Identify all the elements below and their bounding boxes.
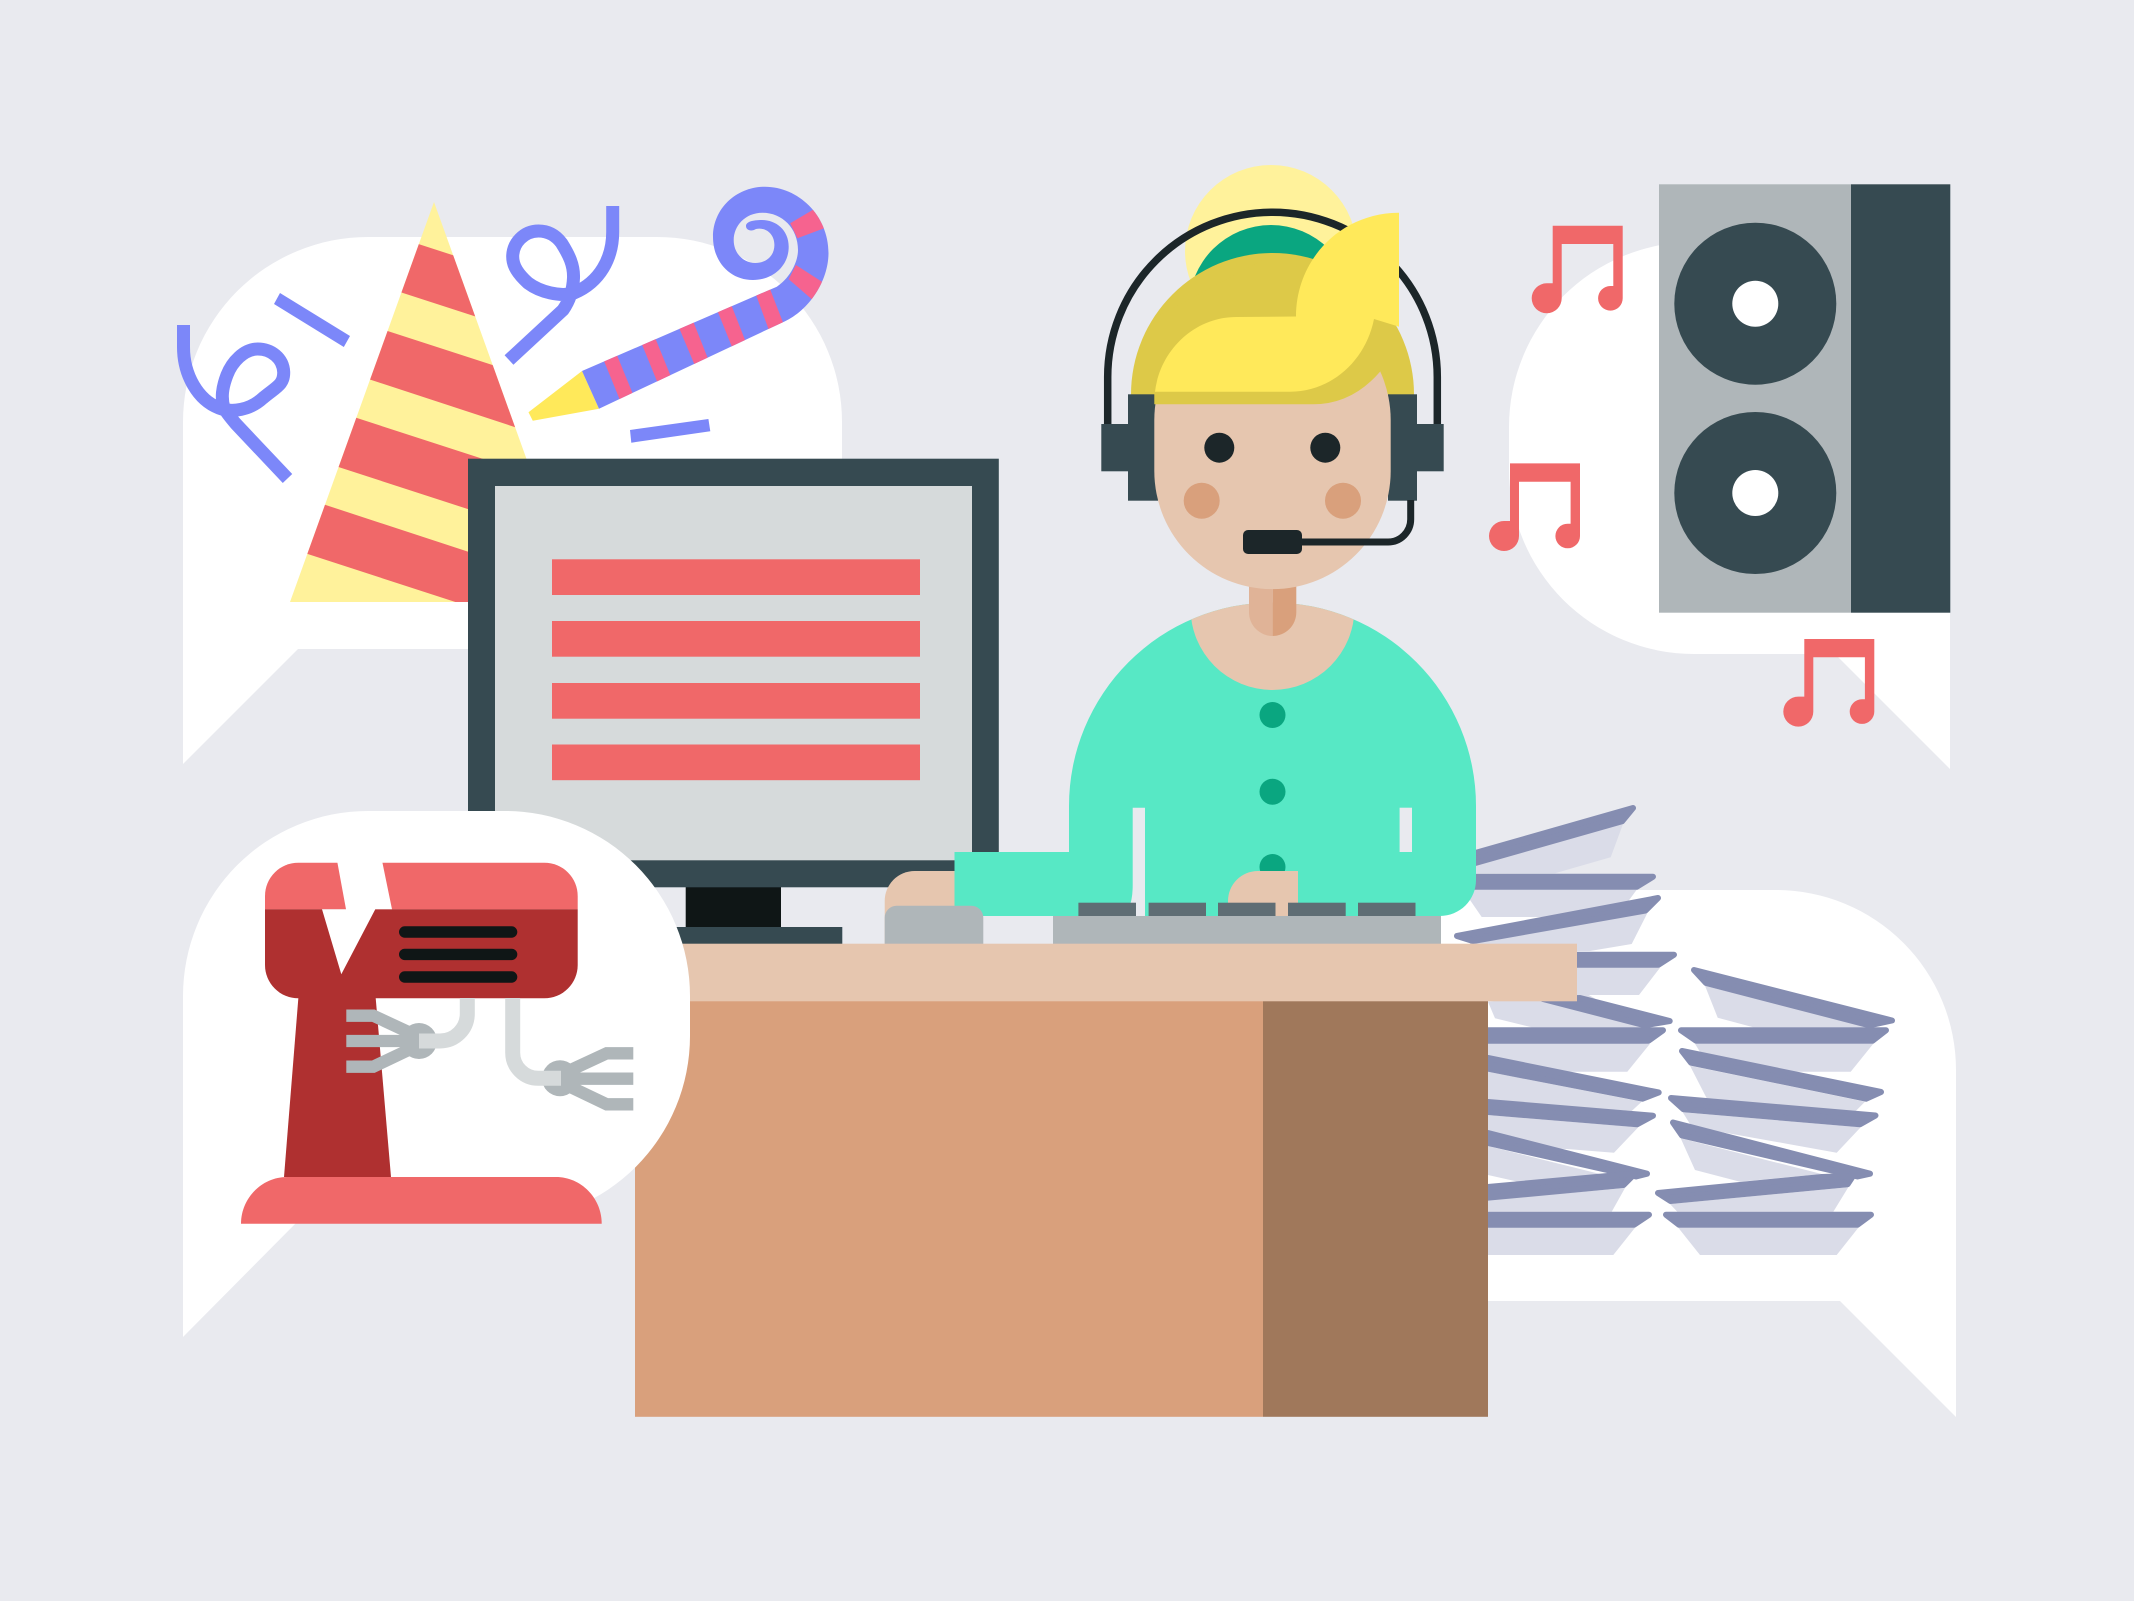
hair back [1131, 253, 1414, 394]
icon: confetti bar upper [274, 293, 350, 347]
desk [635, 944, 1577, 1417]
shirt buttons [1260, 702, 1286, 880]
mixer vents [399, 926, 517, 983]
keyboard [1053, 916, 1441, 944]
hair fringe shadow [1154, 255, 1380, 404]
mixer column [284, 990, 391, 1177]
arm gaps [1120, 808, 1412, 916]
neck [1249, 580, 1296, 636]
whisk right [513, 998, 633, 1104]
icon: party hat [290, 202, 526, 602]
mixer base [241, 1177, 602, 1224]
speech bubble: music [1509, 242, 1950, 769]
icon: stand mixer [241, 862, 633, 1224]
stack of plates: front column [1658, 970, 1892, 1255]
hair band [1189, 225, 1353, 389]
mixer head [265, 862, 578, 998]
icon: left streamer curl [184, 325, 288, 478]
torso [954, 602, 1476, 916]
mouse [885, 906, 983, 944]
speech bubble: dishes [1300, 890, 1956, 1417]
eyes [1204, 433, 1340, 463]
icon: music note bottom [1783, 639, 1874, 727]
stack of plates: back column [1457, 808, 1674, 1255]
icon: party blower [528, 187, 830, 421]
monitor [468, 459, 999, 944]
collar skin [1191, 602, 1354, 690]
cheeks [1184, 483, 1361, 519]
headset band [1108, 212, 1437, 425]
headset ear cups [1101, 394, 1444, 501]
icon: music note top [1532, 226, 1623, 313]
icon: loudspeaker [1659, 184, 1950, 613]
right hand [1228, 871, 1298, 916]
screen text lines [552, 559, 920, 780]
speech bubble: mixer [183, 811, 690, 1337]
whisk left [346, 998, 467, 1067]
icon: confetti bar lower [630, 419, 710, 443]
monitor stand [640, 887, 842, 944]
icon: right streamer curl [509, 206, 613, 360]
person: call-centre worker [885, 165, 1476, 944]
icon: music note middle [1489, 463, 1580, 551]
headset microphone [1243, 500, 1411, 554]
face [1154, 302, 1391, 589]
speech bubble: party [183, 237, 842, 764]
left hand [885, 871, 954, 944]
hair front [1155, 213, 1399, 392]
hair bun [1185, 165, 1357, 337]
keyboard keys [1078, 903, 1416, 916]
